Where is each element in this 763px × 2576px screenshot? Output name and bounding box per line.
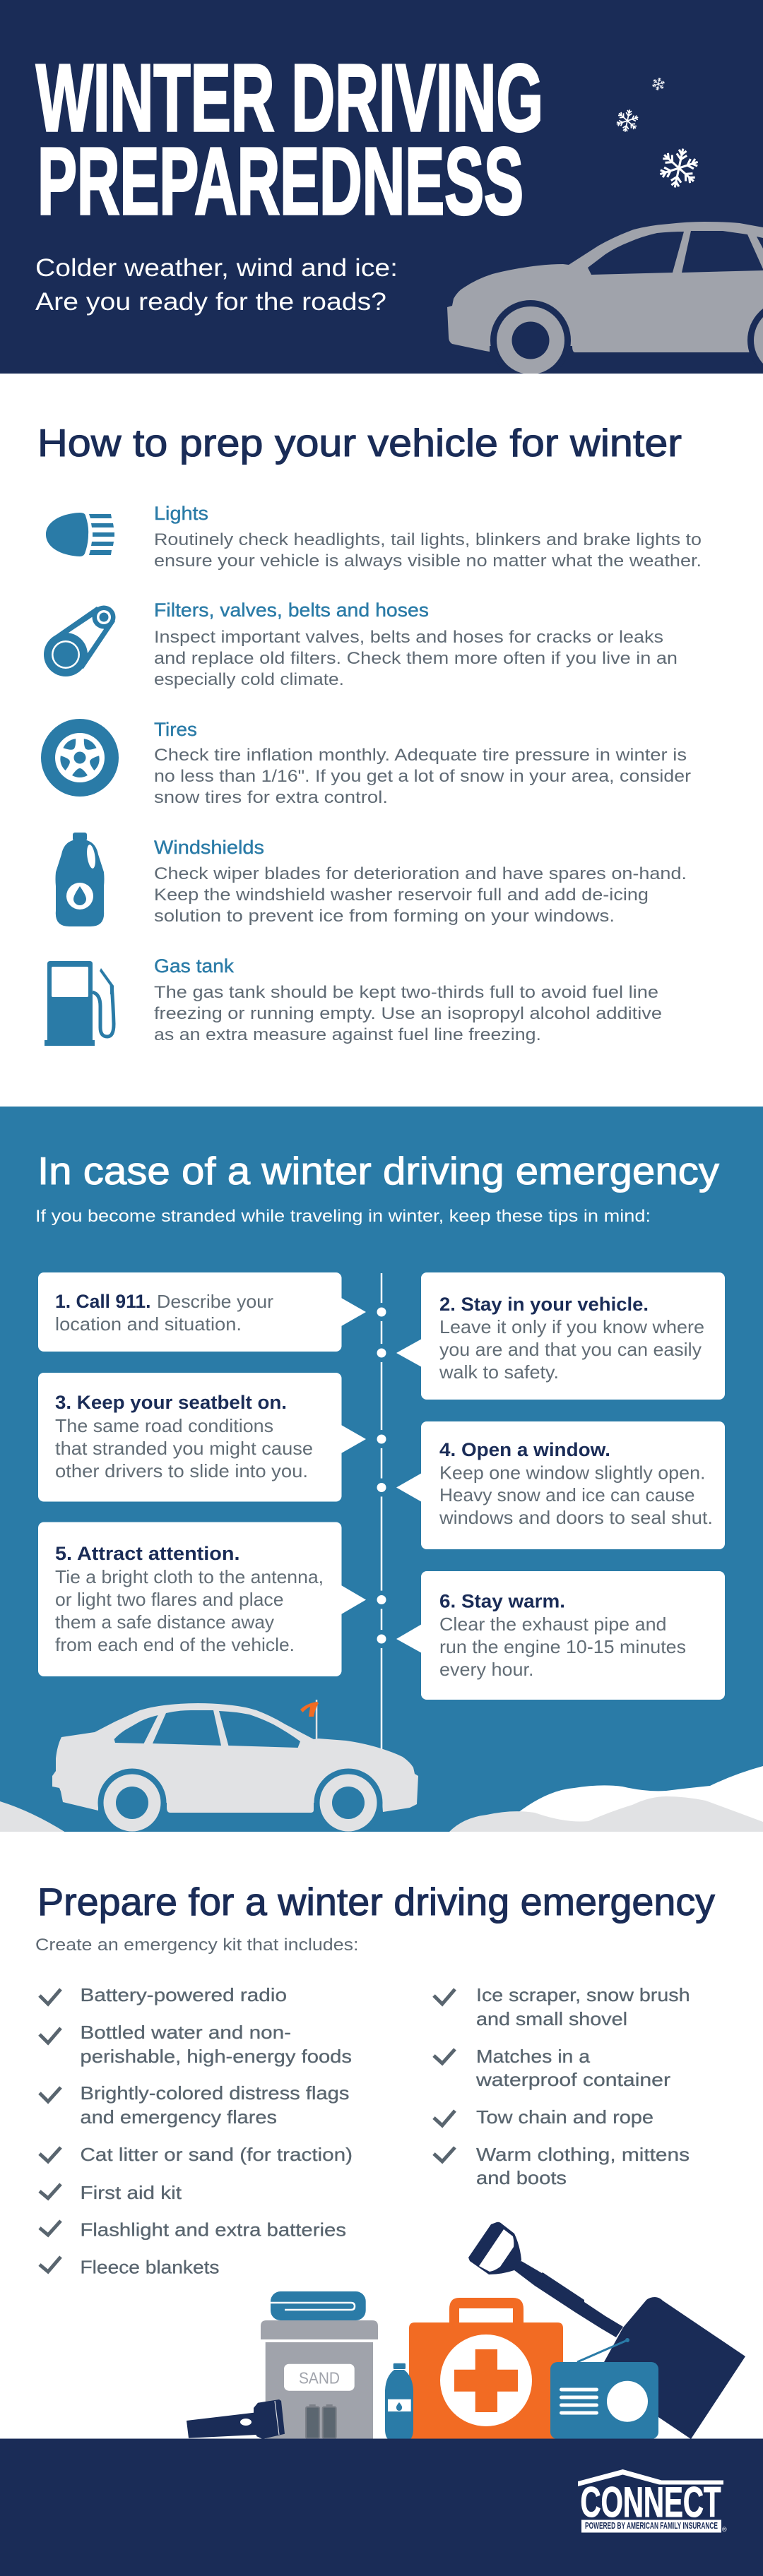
- checklist: left column: [40, 1984, 353, 2278]
- item: tires: Tires: [154, 719, 197, 740]
- icon: tire: [41, 719, 119, 797]
- checklist: right column: Warm clothing, mittens: [476, 2144, 690, 2165]
- panel: header: [0, 0, 763, 381]
- item: filters: and replace old filters. Check them more often if you live in an: [154, 649, 678, 668]
- heading: vehicle prep: How to prep your vehicle for winter: [37, 421, 682, 465]
- timeline: [372, 1273, 391, 1753]
- card: step 3: The same road conditions: [55, 1415, 273, 1436]
- item: windshields: [55, 833, 687, 926]
- title: [36, 44, 543, 234]
- icon: first aid kit: [409, 2298, 563, 2439]
- item: gas tank: [45, 955, 662, 1046]
- icon: snow shovel: [468, 2222, 745, 2439]
- panel: vehicle prep: [0, 374, 763, 1107]
- item: tires: no less than 1/16". If you get a lot of snow in your area, consider: [154, 767, 691, 786]
- item: lights: Lights: [154, 503, 208, 524]
- icon: washer fluid bottle: [55, 833, 105, 926]
- logo: Connect: [578, 2469, 727, 2533]
- panel: emergency kit: [0, 1832, 763, 2440]
- card: step 2: [396, 1272, 725, 1400]
- checklist: right column: Tow chain and rope: [476, 2106, 653, 2128]
- subtitle: Colder weather, wind and ice:: [35, 254, 398, 282]
- item: tires: Check tire inflation monthly. Adequate tire pressure in winter is: [154, 746, 687, 765]
- card: step 5: them a safe distance away: [55, 1611, 274, 1633]
- item: gas tank: freezing or running empty. Use an isopropyl alcohol additive: [154, 1004, 662, 1023]
- item: windshields: solution to prevent ice from forming on your windows.: [154, 907, 615, 926]
- card: step 5: from each end of the vehicle.: [55, 1634, 295, 1655]
- checklist: right column: waterproof container: [475, 2069, 670, 2090]
- icon: water bottle: [385, 2363, 413, 2439]
- card: step 5: or light two flares and place: [55, 1589, 284, 1610]
- item: gas tank: The gas tank should be kept two-thirds full to avoid fuel line: [154, 983, 658, 1002]
- heading: emergency: In case of a winter driving emergency: [37, 1149, 720, 1193]
- item: filters: Filters, valves, belts and hoses: [154, 600, 429, 621]
- item: tires: snow tires for extra control.: [154, 788, 388, 807]
- subheading: emergency: If you become stranded while traveling in winter, keep these tips in mind:: [35, 1207, 651, 1226]
- card: step 2: you are and that you can easily: [439, 1339, 702, 1360]
- logo: Connect: ®: [722, 2526, 727, 2533]
- item: lights: Routinely check headlights, tail lights, blinkers and brake lights to: [154, 530, 702, 549]
- checklist: left column: Cat litter or sand (for traction): [81, 2144, 353, 2165]
- card: step 6: every hour.: [439, 1659, 534, 1680]
- card: step 2: walk to safety.: [439, 1361, 559, 1383]
- card: step 4: Keep one window slightly open.: [439, 1462, 705, 1483]
- item: windshields: Keep the windshield washer reservoir full and add de-icing: [154, 886, 649, 905]
- card: step 4: Heavy snow and ice can cause: [439, 1484, 695, 1505]
- icon: headlight: [46, 513, 114, 556]
- icon: radio: [550, 2338, 658, 2439]
- icon: snowflakes: [614, 76, 702, 191]
- checklist: right column: Matches in a: [476, 2046, 591, 2067]
- subheading: kit: Create an emergency kit that includes:: [35, 1936, 359, 1955]
- icon: blanket: [268, 2291, 366, 2320]
- checklist: left column: Bottled water and non-: [81, 2022, 291, 2043]
- icon: batteries: [306, 2404, 336, 2438]
- card: step 3: 3. Keep your seatbelt on.: [55, 1392, 287, 1413]
- icon: gas pump: [45, 961, 114, 1046]
- checklist: right column: and small shovel: [476, 2008, 627, 2029]
- card: step 1: [38, 1272, 366, 1352]
- card: step 6: run the engine 10-15 minutes: [439, 1636, 686, 1657]
- card: step 2: 2. Stay in your vehicle.: [439, 1294, 649, 1315]
- checklist: left column: Battery-powered radio: [81, 1984, 287, 2005]
- card: step 1: Describe your: [157, 1291, 273, 1312]
- card: step 6: [396, 1571, 725, 1700]
- item: gas tank: Gas tank: [154, 955, 235, 977]
- panel: footer: [0, 2439, 763, 2576]
- checklist: left column: First aid kit: [81, 2182, 182, 2203]
- checklist: left column: Flashlight and extra batteries: [81, 2219, 346, 2240]
- icon: stranded car with flag: [52, 1700, 418, 1837]
- card: step 4: [396, 1421, 725, 1549]
- snow drifts: [0, 1766, 763, 1832]
- card: step 3: other drivers to slide into you.: [55, 1460, 308, 1481]
- icon: sand jar: SAND: [299, 2369, 340, 2387]
- panel: emergency tips: [0, 1107, 763, 1837]
- card: step 5: Tie a bright cloth to the antenna,: [55, 1566, 324, 1587]
- checklist: left column: Brightly-colored distress flags: [81, 2082, 349, 2104]
- card: step 5: [38, 1522, 366, 1676]
- subtitle: [35, 254, 398, 316]
- card: step 6: Clear the exhaust pipe and: [439, 1614, 667, 1635]
- icon: gray car: [447, 222, 763, 381]
- checklist: right column: Ice scraper, snow brush: [476, 1984, 690, 2005]
- subtitle: Are you ready for the roads?: [35, 288, 386, 316]
- checklist: left column: and emergency flares: [81, 2106, 277, 2128]
- item: filters: especially cold climate.: [154, 670, 344, 689]
- icon: flashlight: [187, 2399, 285, 2439]
- card: step 2: Leave it only if you know where: [439, 1316, 704, 1337]
- heading: kit: Prepare for a winter driving emergency: [37, 1880, 715, 1924]
- checklist: right column: [434, 1984, 690, 2188]
- card: step 1: 1. Call 911.: [55, 1291, 151, 1312]
- card: step 4: 4. Open a window.: [439, 1439, 610, 1460]
- checklist: left column: Fleece blankets: [81, 2257, 219, 2278]
- card: step 3: [38, 1373, 366, 1501]
- item: tires: [41, 719, 691, 807]
- item: filters: [44, 600, 678, 689]
- card: step 6: 6. Stay warm.: [439, 1590, 565, 1611]
- checklist: left column: perishable, high-energy foods: [81, 2046, 352, 2067]
- item: lights: [46, 503, 702, 571]
- item: gas tank: as an extra measure against fuel line freezing.: [154, 1025, 541, 1044]
- icon: belt and pulleys: [44, 606, 116, 676]
- item: filters: Inspect important valves, belts and hoses for cracks or leaks: [154, 628, 663, 647]
- card: step 3: that stranded you might cause: [55, 1438, 313, 1459]
- card: step 4: windows and doors to seal shut.: [439, 1507, 713, 1528]
- illustration: emergency kit items: [187, 2222, 745, 2439]
- icon: sand jar: [261, 2320, 378, 2439]
- item: windshields: Windshields: [154, 837, 264, 858]
- checklist: right column: and boots: [476, 2167, 567, 2188]
- card: step 5: 5. Attract attention.: [55, 1543, 240, 1564]
- item: lights: ensure your vehicle is always visible no matter what the weather.: [154, 551, 702, 571]
- item: windshields: Check wiper blades for deterioration and have spares on-hand.: [154, 864, 687, 883]
- card: step 1: location and situation.: [55, 1313, 242, 1335]
